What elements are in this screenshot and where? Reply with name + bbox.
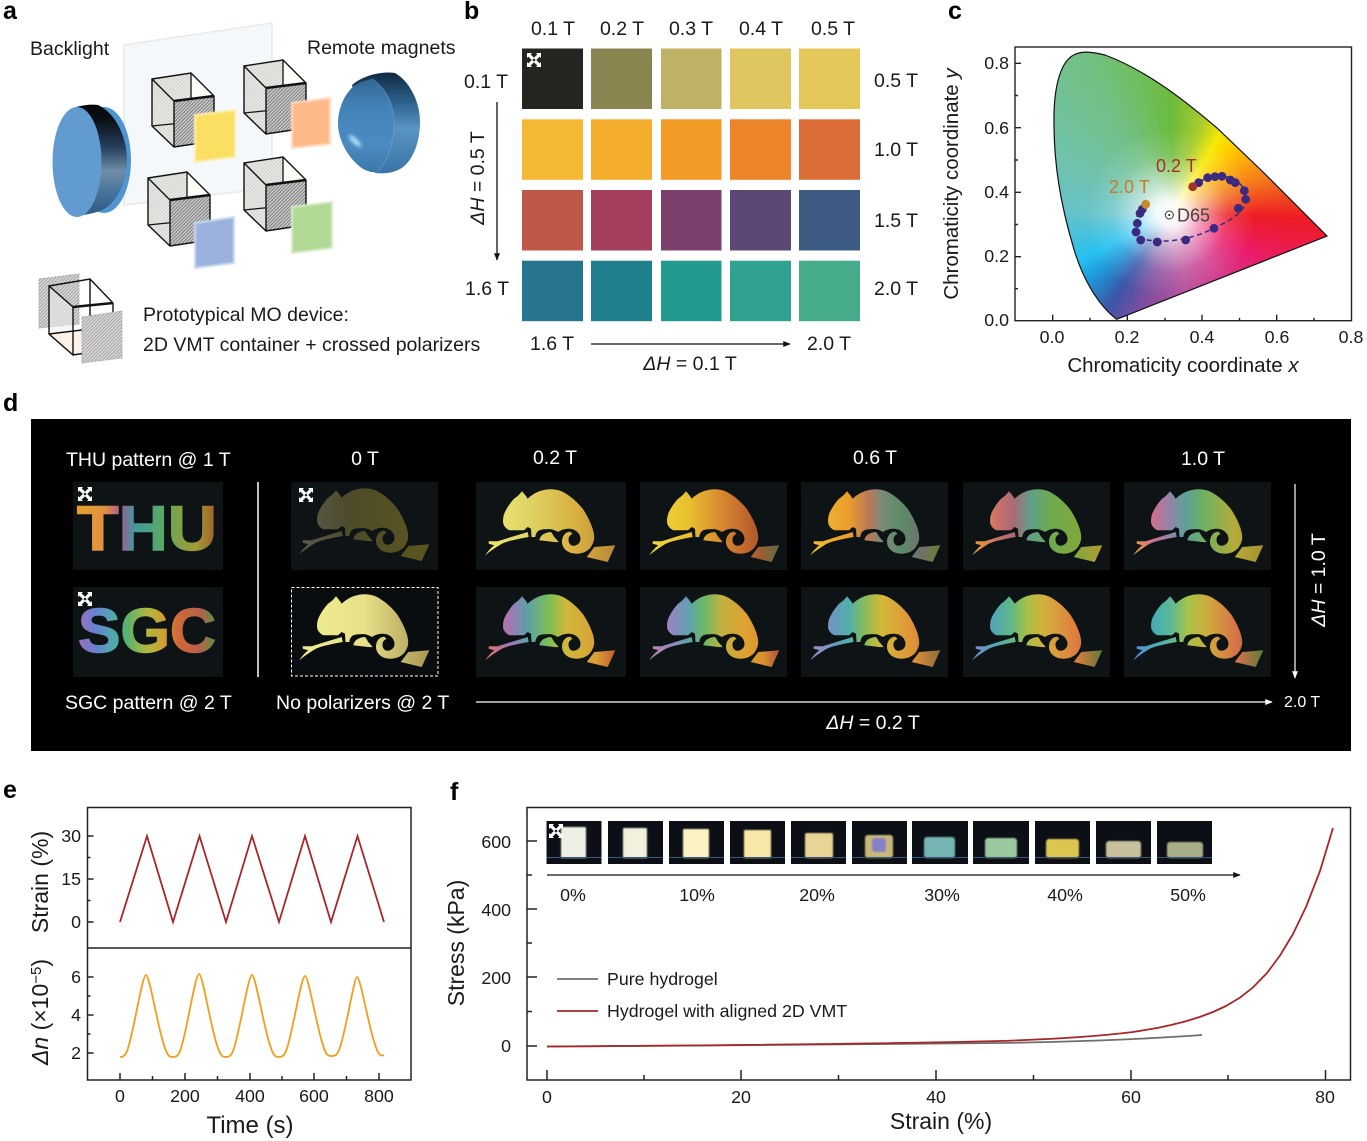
y tick labels: 400 — [481, 900, 511, 920]
row 2 swatches — [522, 119, 860, 180]
THU pattern photo — [73, 482, 223, 570]
y tick labels — [481, 832, 511, 1056]
chameleon row 2 col 2 — [640, 587, 787, 677]
pure hydrogel curve — [547, 1035, 1202, 1046]
panel letter d: d — [3, 389, 18, 417]
device description: Prototypical MO device: — [143, 304, 349, 326]
panel e: strain and birefringence cycles — [3, 776, 411, 1139]
chameleon row 2 col 4 — [963, 587, 1110, 677]
bottom labels: 2.0 T — [807, 333, 851, 355]
index tick labels: 4 — [71, 1005, 81, 1025]
SGC pattern photo: SGC — [78, 597, 216, 666]
arrow: horizontal step — [591, 343, 790, 345]
device description line two: 2D VMT container + crossed polarizers — [143, 334, 480, 356]
sample photo 1 — [608, 821, 663, 864]
strain tick labels — [61, 826, 81, 932]
x tick labels: 0.8 — [1339, 327, 1363, 347]
compression labels: 50% — [1170, 885, 1206, 905]
x axis title time: Time (s) — [206, 1112, 294, 1139]
right labels: 2.0 T — [874, 278, 918, 300]
label: Backlight: Backlight — [30, 38, 110, 60]
y tick labels — [984, 53, 1009, 330]
D65 white point: D65 — [1177, 206, 1210, 226]
y tick labels: 0.6 — [984, 118, 1009, 138]
legend — [557, 969, 847, 1021]
sample photo 4 — [791, 821, 846, 864]
No polarizers caption: No polarizers @ 2 T — [276, 692, 449, 714]
column labels: 0.1 T — [531, 18, 575, 40]
icon: backlight cylinder — [52, 105, 131, 217]
orange Δn curve — [120, 974, 384, 1057]
sample photo 9 — [1096, 821, 1151, 864]
sample photo 2 — [669, 821, 724, 864]
chameleon row 1 col 4 — [963, 482, 1110, 570]
icon: crossed polarizer mark — [527, 53, 541, 67]
sample photo 6 — [912, 821, 968, 864]
right labels: 1.0 T — [874, 139, 918, 161]
cube with yellow pixel — [152, 73, 235, 162]
x axis title: Chromaticity coordinate x — [1067, 354, 1299, 377]
time tick labels: 400 — [235, 1086, 265, 1106]
chameleon row 1 col 5 — [1124, 482, 1271, 570]
chameleon row 1 col 1 — [476, 482, 626, 570]
index tick labels — [71, 967, 81, 1063]
y axis title delta n: −5 — [28, 967, 45, 984]
y axis title delta n: ) — [27, 959, 53, 967]
field label 1.0 T: 1.0 T — [1181, 448, 1225, 470]
strain tick labels: 0 — [71, 912, 81, 932]
sample photo 3 — [730, 821, 785, 864]
x tick labels: 40 — [926, 1087, 946, 1107]
label: 2.0 T end: 2.0 T — [1284, 694, 1320, 711]
sample photo 8 — [1035, 821, 1090, 864]
x tick labels: 0.6 — [1265, 327, 1289, 347]
time tick labels: 800 — [364, 1086, 394, 1106]
time tick labels: 200 — [170, 1086, 200, 1106]
x tick labels — [1040, 327, 1363, 347]
divider line — [257, 482, 259, 677]
label: 2.0 T: 2.0 T — [1109, 177, 1150, 197]
arrow: vertical step — [496, 102, 498, 260]
sample photo 0 — [546, 821, 602, 864]
cube with orange pixel — [244, 60, 330, 148]
left labels — [464, 71, 509, 300]
y axis title: Chromaticity coordinate y — [940, 67, 963, 300]
chameleon row 2 col 3 — [801, 587, 948, 677]
SGC pattern photo — [73, 587, 223, 677]
y tick labels: 0.2 — [984, 246, 1009, 266]
strain triangle wave — [120, 836, 384, 922]
panel a: magneto-optical device schematic — [3, 0, 480, 363]
x axis title: Strain (%) — [890, 1108, 992, 1134]
right labels: 0.5 T — [874, 70, 918, 92]
right labels: 1.5 T — [874, 210, 918, 232]
arrow: vertical field sweep — [1294, 484, 1296, 678]
THU heading: THU pattern @ 1 T — [66, 449, 231, 471]
compression labels: 30% — [924, 885, 960, 905]
x tick labels: 0.2 — [1115, 327, 1139, 347]
SGC caption: SGC pattern @ 2 T — [65, 692, 232, 714]
bottom labels: 1.6 T — [530, 333, 574, 355]
panel b: colour swatch grid — [464, 0, 918, 375]
row 3 swatches — [522, 190, 860, 250]
y tick labels: 200 — [481, 968, 511, 988]
label: delta H 0.2 T: ΔH = 0.2 T — [825, 712, 920, 734]
translucent display plate — [124, 23, 272, 205]
strain tick labels: 30 — [61, 826, 81, 846]
column labels: 0.3 T — [669, 18, 713, 40]
chameleon 0 T — [291, 482, 438, 570]
x tick labels: 0 — [542, 1087, 552, 1107]
column labels: 0.2 T — [600, 18, 644, 40]
icon: remote magnet — [338, 73, 420, 173]
cube with green pixel — [244, 157, 332, 253]
y axis title strain: Strain (%) — [27, 831, 53, 933]
left labels: 0.1 T — [464, 71, 508, 93]
compression labels: 40% — [1047, 885, 1083, 905]
legend: Pure hydrogel — [607, 969, 718, 989]
field label 0 T: 0 T — [351, 448, 379, 470]
hydrogel with VMT curve — [547, 828, 1333, 1046]
bottom labels — [530, 333, 851, 355]
arrow: compression strain — [547, 874, 1240, 876]
y tick labels: 0 — [501, 1036, 511, 1056]
left labels: 1.6 T — [465, 278, 509, 300]
y axis title: Stress (kPa) — [443, 880, 469, 1006]
row 4 swatches — [522, 261, 860, 321]
index tick labels: 6 — [71, 967, 81, 987]
cube with blue pixel — [148, 172, 234, 268]
label: 0.2 T: 0.2 T — [1156, 156, 1197, 176]
compression labels — [560, 885, 1206, 905]
x tick labels: 80 — [1315, 1087, 1335, 1107]
time tick labels: 600 — [299, 1086, 329, 1106]
panel letter e: e — [3, 776, 17, 804]
x tick labels: 60 — [1121, 1087, 1141, 1107]
x tick labels — [542, 1087, 1335, 1107]
chameleon row 1 col 2 — [640, 482, 787, 570]
y tick labels: 600 — [481, 832, 511, 852]
chameleon row 2 col 5 — [1124, 587, 1271, 677]
field label 0.6 T: 0.6 T — [853, 447, 897, 469]
chromaticity gamut — [1053, 52, 1328, 320]
sample photo 7 — [973, 821, 1029, 864]
legend: Hydrogel with aligned 2D VMT — [607, 1001, 847, 1021]
x tick labels: 0.4 — [1190, 327, 1214, 347]
y tick labels: 0.0 — [984, 310, 1009, 330]
index tick labels: 2 — [71, 1043, 81, 1063]
panel f: stress-strain plot — [443, 778, 1350, 1134]
time tick labels: 0 — [115, 1086, 125, 1106]
axes frame and ticks — [1015, 47, 1352, 321]
THU pattern photo: THU — [77, 494, 217, 564]
time tick labels — [115, 1086, 394, 1106]
right labels — [874, 70, 918, 300]
x tick labels: 20 — [731, 1087, 751, 1107]
axes frame and ticks — [527, 808, 1350, 1080]
label: delta H 1.0 T: ΔH = 1.0 T — [1308, 533, 1330, 628]
chameleon row 2 col 1 — [476, 587, 626, 677]
icon: prototypical device cube with crossed polarizers — [39, 274, 122, 363]
panel letter f: f — [450, 778, 459, 806]
y axis title delta n: Δn (×10 — [27, 984, 53, 1065]
column labels: 0.4 T — [739, 18, 783, 40]
y tick labels: 0.8 — [984, 53, 1009, 73]
strain tick labels: 15 — [61, 869, 81, 889]
x tick labels: 0.0 — [1040, 327, 1064, 347]
sample photo 5 — [852, 821, 907, 864]
chameleon row 1 col 3 — [801, 482, 948, 570]
compression labels: 20% — [799, 885, 835, 905]
compression labels: 0% — [560, 885, 586, 905]
colour trajectory — [1132, 172, 1250, 246]
column labels — [531, 18, 855, 40]
label: Remote magnets: Remote magnets — [307, 37, 456, 59]
axes frame and ticks — [88, 808, 411, 1080]
y tick labels: 0.4 — [984, 182, 1009, 202]
sample photo 10 — [1157, 821, 1212, 864]
vertical delta label: ΔH = 0.5 T — [467, 131, 489, 226]
panel d: black patterned display panel — [31, 419, 1351, 751]
row 1 swatches — [522, 48, 860, 109]
column labels: 0.5 T — [811, 18, 855, 40]
field label 0.2 T: 0.2 T — [533, 447, 577, 469]
compression labels: 10% — [679, 885, 715, 905]
horizontal delta label: ΔH = 0.1 T — [642, 353, 737, 375]
arrow: horizontal field sweep — [476, 701, 1272, 703]
chameleon no polarizers — [292, 588, 438, 676]
panel c: CIE chromaticity diagram — [940, 0, 1363, 377]
